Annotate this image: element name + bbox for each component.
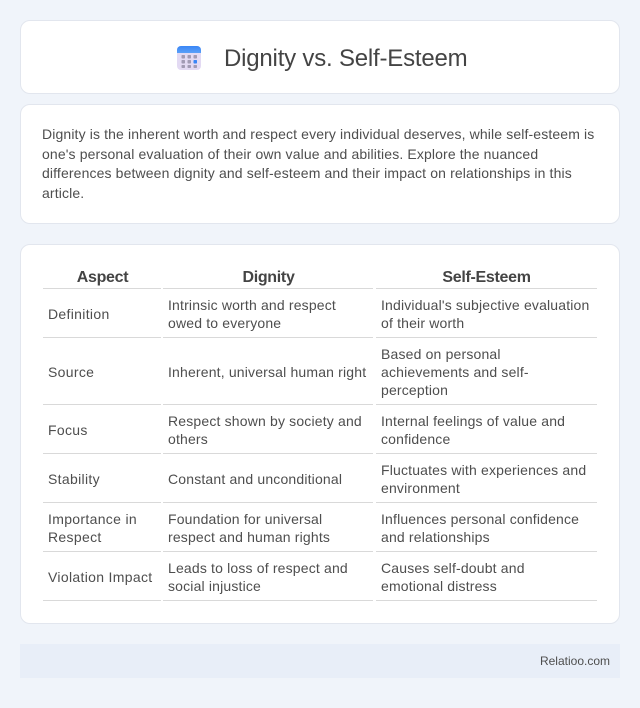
row: Violation Impact: social injustice — [168, 578, 261, 594]
row: Focus: confidence — [381, 431, 450, 447]
row: Source: perception — [381, 382, 448, 398]
row: Importance in Respect: Importance in — [48, 511, 137, 527]
row: Source: achievements and self- — [381, 364, 529, 380]
table card — [20, 244, 620, 624]
row: Violation Impact: Leads to loss of respect and — [168, 560, 348, 576]
row: Definition: of their worth — [381, 315, 464, 331]
row: Violation Impact: emotional distress — [381, 578, 497, 594]
row: Importance in Respect: Influences personal confidence — [381, 511, 579, 527]
intro text — [42, 126, 594, 201]
row: Definition: Individual's subjective evaluation — [381, 297, 589, 313]
column heading: Dignity: Dignity — [242, 269, 295, 286]
title: Dignity vs. Self-Esteem — [224, 45, 467, 72]
row: Focus: Internal feelings of value and — [381, 413, 565, 429]
row: Importance in Respect — [48, 511, 579, 545]
row: Focus — [48, 413, 565, 447]
row: Source: Source — [48, 364, 94, 380]
row: Violation Impact — [48, 560, 525, 594]
icon: calendar — [177, 46, 201, 70]
intro card — [20, 104, 620, 224]
header card — [20, 20, 620, 94]
intro text: differences between dignity and self-esteem and their impact on relationships in this — [42, 165, 572, 181]
row: Stability — [48, 462, 586, 496]
row: Definition: Definition — [48, 306, 110, 322]
row: Definition: Intrinsic worth and respect — [168, 297, 336, 313]
row: Violation Impact: Violation Impact — [48, 569, 152, 585]
column heading: Self-Esteem: Self-Esteem — [442, 269, 531, 286]
row: Focus: Respect shown by society and — [168, 413, 362, 429]
intro text: one's personal evaluation of their own value and abilities. Explore the nuanced — [42, 146, 538, 162]
row: Focus: others — [168, 431, 208, 447]
row: Stability: Stability — [48, 471, 100, 487]
footer bar — [20, 644, 620, 678]
row: Stability: environment — [381, 480, 460, 496]
row: Importance in Respect: and relationships — [381, 529, 490, 545]
row: Importance in Respect: respect and human rights — [168, 529, 330, 545]
row: Importance in Respect: Foundation for universal — [168, 511, 322, 527]
row: Stability: Fluctuates with experiences and — [381, 462, 586, 478]
row: Importance in Respect: Respect — [48, 529, 102, 545]
row: Source — [48, 346, 529, 398]
row: Violation Impact: Causes self-doubt and — [381, 560, 525, 576]
row: Definition — [48, 297, 589, 331]
intro text: article. — [42, 185, 84, 201]
footer credit: Relatioo.com — [540, 654, 610, 668]
row: Focus: Focus — [48, 422, 88, 438]
column heading: Aspect: Aspect — [77, 269, 128, 286]
row: Stability: Constant and unconditional — [168, 471, 342, 487]
row: Source: Inherent, universal human right — [168, 364, 366, 380]
intro text: Dignity is the inherent worth and respect every individual deserves, while self-esteem is — [42, 126, 594, 142]
row: Source: Based on personal — [381, 346, 501, 362]
row: Definition: owed to everyone — [168, 315, 281, 331]
